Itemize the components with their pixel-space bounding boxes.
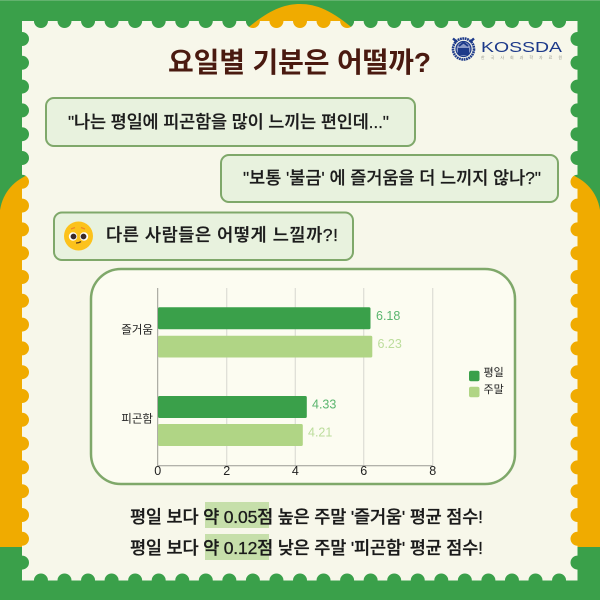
logo wordmark: KOSSDA	[481, 39, 562, 56]
legend: 주말	[484, 383, 504, 396]
logo: KOSSDA	[453, 38, 562, 60]
category labels: 피곤함	[121, 412, 153, 426]
highlight: 약 0.12점	[205, 534, 269, 560]
panel: bar chart	[91, 269, 515, 484]
value labels: 주말	[308, 337, 402, 440]
logo emblem	[453, 38, 474, 60]
bars: 평일	[158, 307, 370, 418]
speech bubble 3	[54, 212, 353, 260]
highlight: 약 0.05점	[205, 502, 269, 528]
legend: 평일	[484, 365, 504, 379]
title: 요일별 기분은 어떨까?	[168, 47, 431, 78]
legend	[469, 365, 504, 397]
value labels: 평일: 4.33	[312, 398, 336, 412]
x axis tick labels: 8	[429, 464, 436, 478]
speech bubble 3: 다른 사람들은 어떻게 느낄까?!	[106, 225, 338, 245]
speech bubble 1	[46, 98, 415, 146]
x axis tick labels: 4	[292, 464, 299, 478]
speech bubble 1: "나는 평일에 피곤함을 많이 느끼는 편인데..."	[68, 112, 389, 132]
x axis tick labels: 0	[154, 464, 161, 478]
grid lines	[227, 288, 433, 466]
logo caption: 한국사회과학자료원	[481, 54, 562, 60]
category labels: 즐거움	[121, 324, 153, 336]
x axis tick labels: 2	[223, 464, 230, 478]
x axis tick labels: 6	[360, 464, 367, 478]
summary line 2: 평일 보다 약 0.12점 낮은 주말 '피곤함' 평균 점수!	[130, 538, 483, 558]
value labels: 평일	[312, 309, 400, 412]
category labels	[121, 324, 153, 426]
value labels: 주말: 6.23	[378, 337, 402, 351]
bars: 주말	[158, 336, 372, 446]
summary line 1: 평일 보다 약 0.05점 높은 주말 '즐거움' 평균 점수!	[130, 507, 483, 527]
value labels: 평일: 6.18	[376, 309, 400, 323]
value labels: 주말: 4.21	[308, 426, 332, 440]
axes	[158, 288, 433, 466]
x axis tick labels	[154, 464, 436, 478]
speech bubble 2	[221, 155, 558, 202]
icon: thinking emoji	[64, 222, 93, 250]
speech bubble 2: "보통 '불금' 에 즐거움을 더 느끼지 않나?"	[243, 168, 541, 188]
